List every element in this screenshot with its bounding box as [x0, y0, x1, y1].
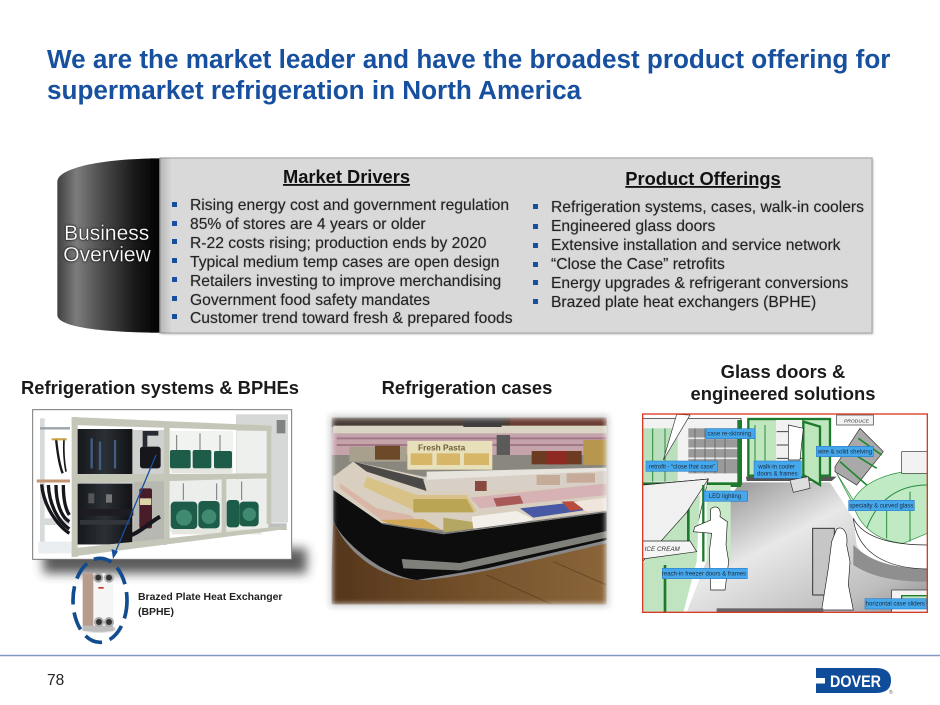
panel: business overview — [57, 158, 873, 334]
sign — [407, 441, 492, 470]
callouts: horizontal case sliders — [866, 602, 925, 608]
title: We are the market leader and have the broadest product offering for — [47, 44, 890, 74]
market drivers list: Government food safety mandates — [190, 292, 430, 309]
market drivers list: 85% of stores are 4 years or older — [190, 216, 426, 233]
logo: Dover: DOVER — [830, 672, 881, 691]
left freezer aisle — [644, 478, 709, 562]
logo: Dover — [816, 668, 893, 696]
callouts: wire & solid shelving — [817, 450, 872, 456]
label: BPHE — [138, 592, 282, 618]
back wall case left — [643, 418, 741, 485]
heading: glass doors: engineered solutions — [691, 383, 875, 404]
cylinder tab — [57, 158, 163, 333]
market drivers list — [172, 197, 513, 327]
product offerings list: Extensive installation and service network — [551, 237, 841, 254]
person left — [693, 507, 729, 590]
illustration: store with glass door solutions: ICE CREAM — [645, 546, 681, 553]
logo: Dover: ® — [889, 689, 893, 696]
product offerings list: “Close the Case” retrofits — [551, 256, 725, 273]
back cooler doors — [748, 419, 830, 476]
arrow: rack to heat exchanger — [112, 455, 156, 559]
dashed ellipse — [73, 558, 127, 642]
market drivers list: R-22 costs rising; production ends by 2020 — [190, 235, 487, 252]
title — [47, 44, 890, 105]
title: supermarket refrigeration in North America — [47, 75, 582, 105]
base — [333, 490, 607, 580]
heading: glass doors — [691, 361, 875, 404]
product offerings list: Energy upgrades & refrigerant conversions — [551, 275, 849, 292]
tab label: Business — [64, 222, 149, 245]
sign text: Fresh Pasta — [418, 443, 466, 453]
product offerings list: Brazed plate heat exchangers (BPHE) — [551, 294, 816, 311]
product offerings list — [533, 199, 864, 311]
content panel — [150, 158, 873, 334]
tab label: Overview — [63, 243, 152, 266]
callouts: doors & frames — [757, 471, 798, 477]
tab label — [63, 222, 152, 266]
photo: refrigeration system rack — [33, 410, 307, 573]
callouts: walk-in cooler — [757, 464, 795, 470]
callouts: reach-in freezer doors & frames — [662, 571, 746, 577]
callouts: retrofit - “close that case” — [649, 464, 715, 470]
market drivers list: Customer trend toward fresh & prepared foods — [190, 310, 513, 327]
heading: refrigeration systems: Refrigeration systems & BPHEs — [21, 377, 299, 398]
callouts: LED lighting — [709, 494, 741, 500]
market drivers list: Retailers investing to improve merchandising — [190, 273, 501, 290]
market drivers list: Typical medium temp cases are open design — [190, 254, 500, 271]
cart and shopper — [813, 528, 834, 595]
heading: glass doors: Glass doors & — [721, 361, 845, 382]
right merch — [837, 415, 873, 425]
photo: refrigeration case — [330, 415, 610, 606]
callouts: case re-skinning — [708, 432, 751, 438]
label: BPHE: (BPHE) — [138, 607, 174, 618]
callouts — [646, 429, 926, 609]
callouts: specialty & curved glass — [849, 503, 913, 509]
label: BPHE: Brazed Plate Heat Exchanger — [138, 592, 282, 603]
footer divider — [0, 654, 940, 656]
product offerings heading: Product Offerings — [625, 168, 781, 189]
product offerings list: Refrigeration systems, cases, walk-in coolers — [551, 199, 864, 216]
page number: 78 — [47, 672, 64, 689]
illustration: store with glass door solutions: PRODUCE — [844, 418, 870, 424]
icon: brazed plate heat exchanger — [73, 558, 127, 642]
market drivers heading: Market Drivers — [283, 166, 410, 187]
illustration: store with glass door solutions — [643, 414, 927, 612]
product offerings list: Engineered glass doors — [551, 218, 716, 235]
food area — [333, 462, 607, 533]
heading: refrigeration cases: Refrigeration cases — [382, 377, 552, 398]
market drivers list: Rising energy cost and government regulation — [190, 197, 509, 214]
